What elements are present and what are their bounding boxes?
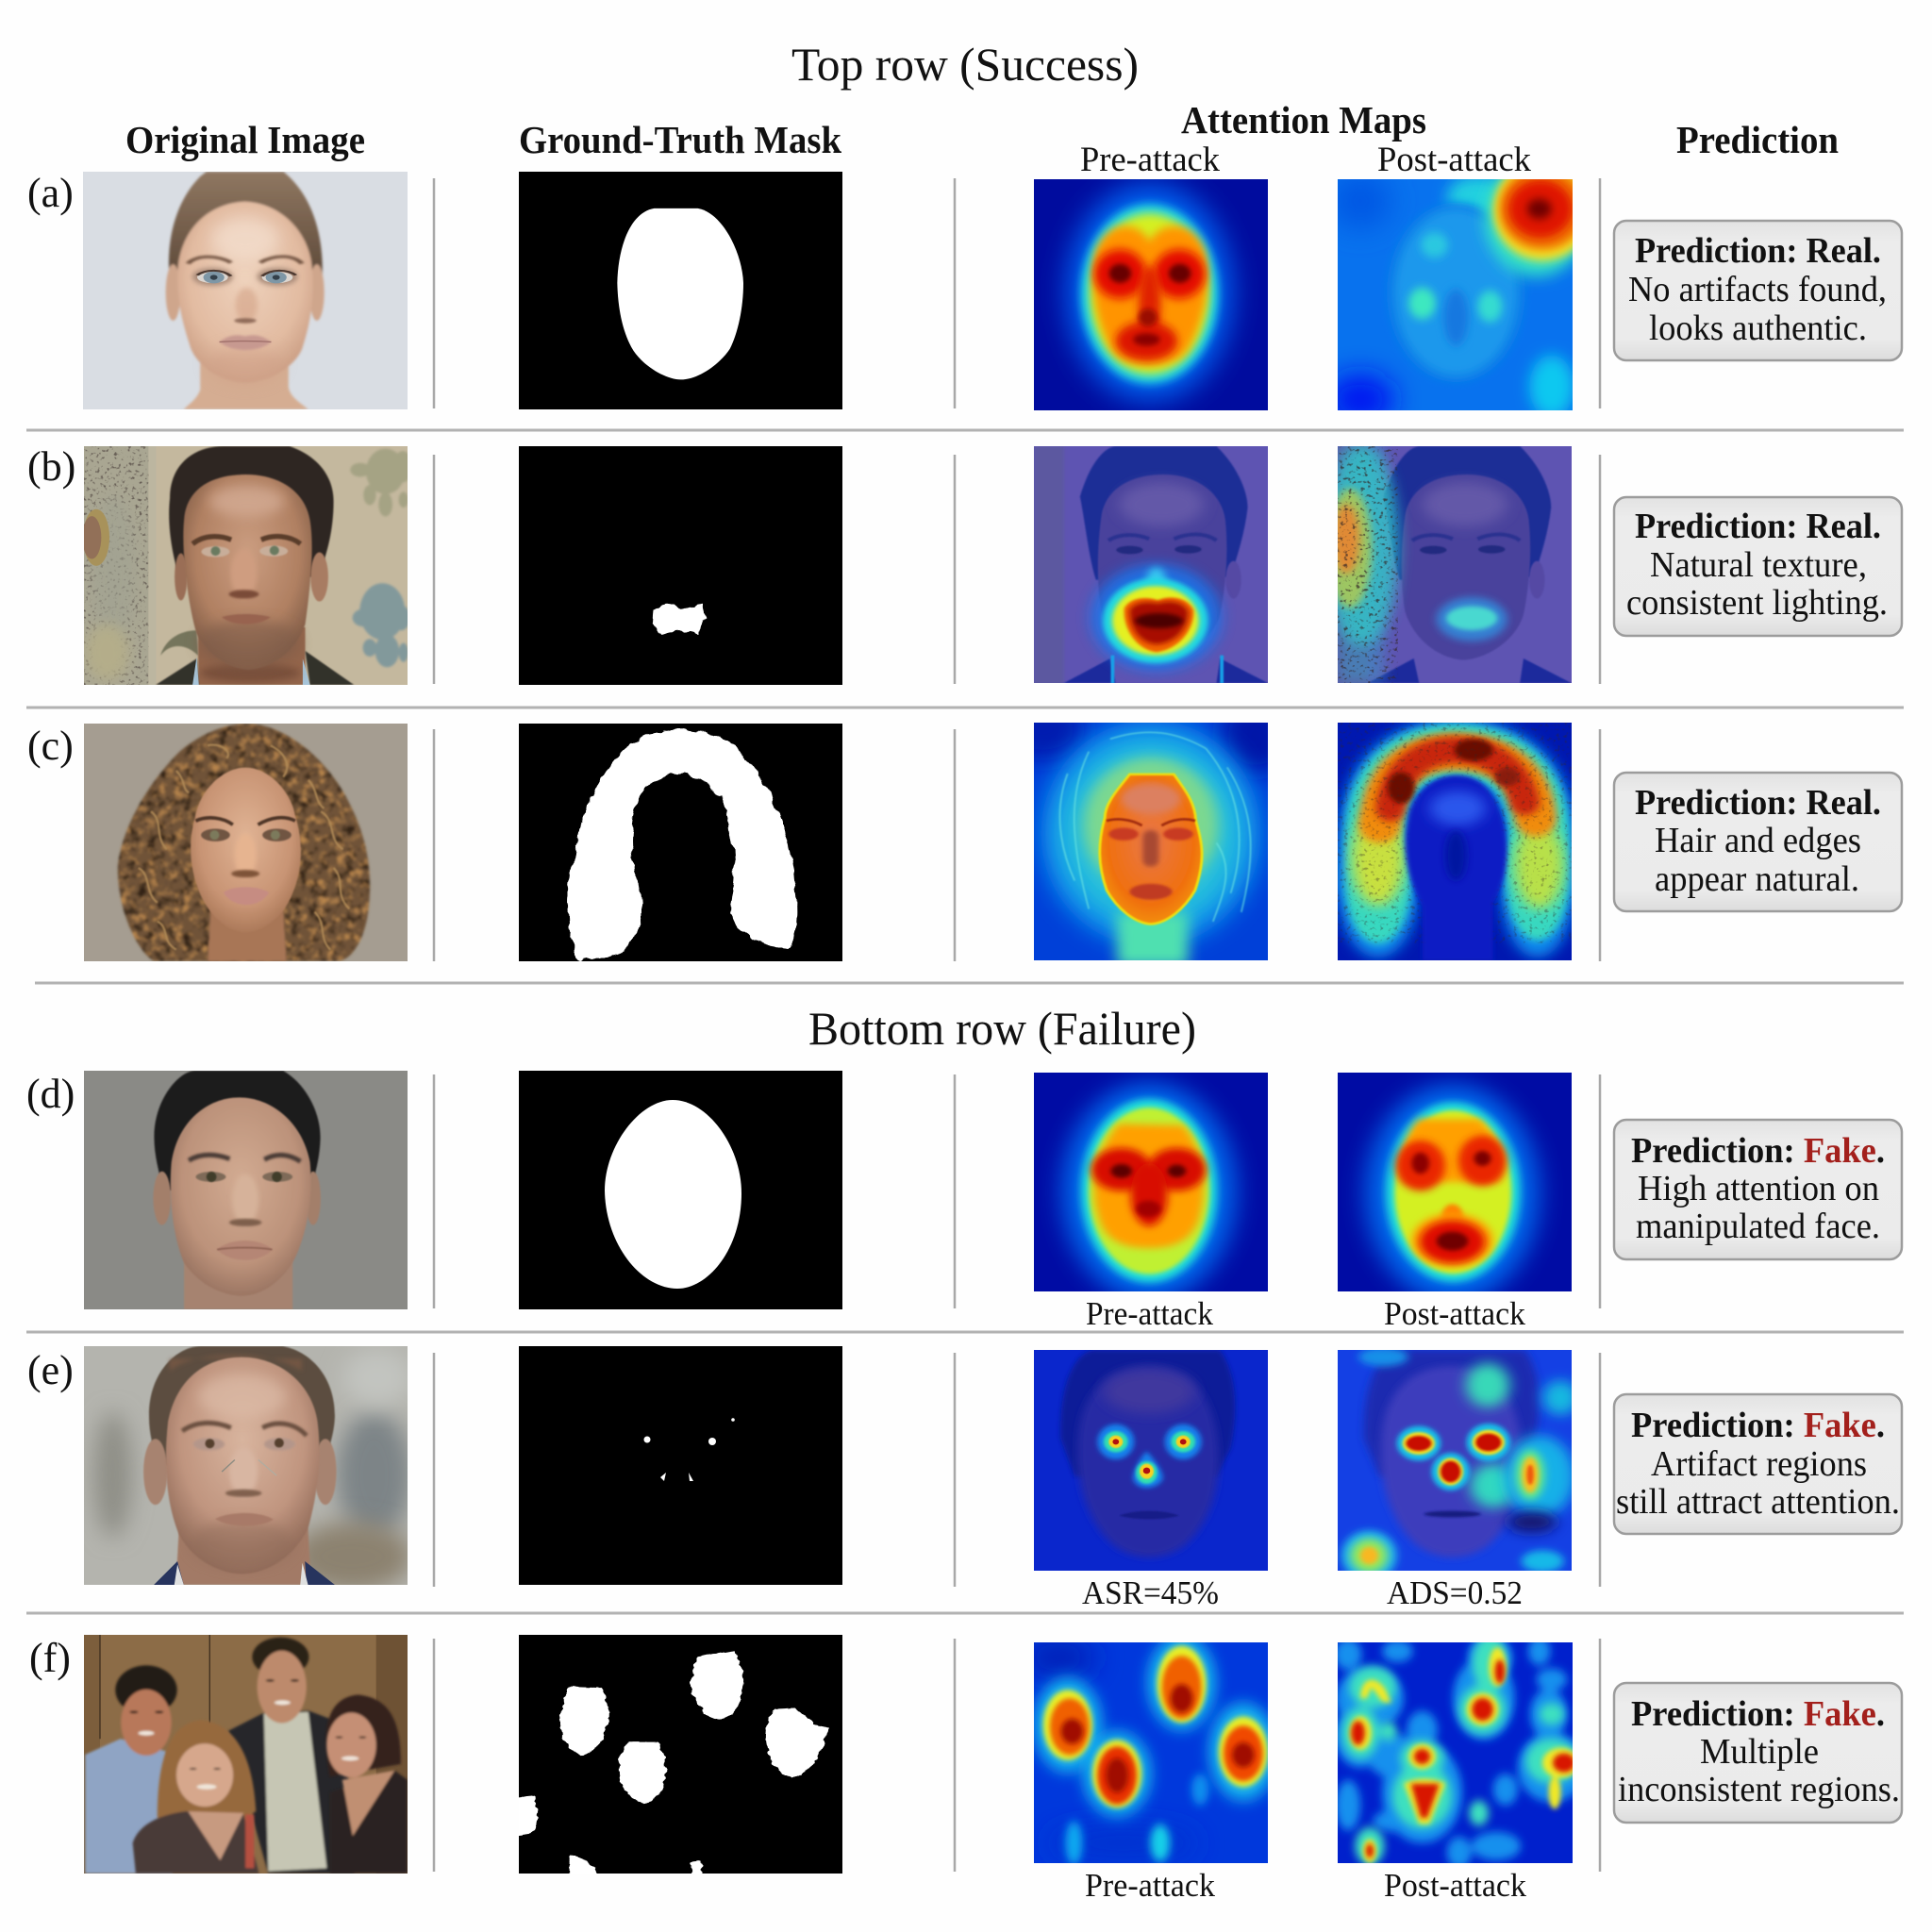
caption: row f pre-attack: Pre-attack [1085, 1867, 1215, 1904]
row labels: (f) [29, 1635, 71, 1681]
heatmap: row e post-attack [1338, 1350, 1572, 1571]
heatmap: row a post-attack [1338, 179, 1573, 410]
photo: row a woman [83, 172, 408, 409]
row labels: (e) [27, 1347, 74, 1393]
row labels: (b) [27, 443, 75, 490]
caption: ADS: ADS=0.52 [1387, 1574, 1523, 1611]
mask: row b [519, 446, 842, 685]
heading: attention maps: Attention Maps [1181, 98, 1426, 142]
heatmap: row b pre-attack [1034, 446, 1268, 683]
photo: row f group of four people [84, 1635, 408, 1874]
prediction box: row f [1614, 1683, 1902, 1823]
prediction box: row c: Prediction: Real. [1635, 783, 1881, 823]
heatmap: row c pre-attack [1034, 723, 1268, 960]
prediction box: row a: looks authentic. [1649, 308, 1867, 348]
sub-heading: pre-attack: Pre-attack [1080, 141, 1220, 179]
mask: row c hair [519, 724, 842, 961]
heatmap: row f post-attack [1338, 1642, 1573, 1863]
heading: original image: Original Image [125, 118, 365, 161]
heading: ground-truth mask: Ground-Truth Mask [519, 118, 841, 161]
prediction box: row b: consistent lighting. [1626, 583, 1888, 623]
title: bottom row: Bottom row (Failure) [808, 1002, 1196, 1055]
person: tall man [228, 1638, 355, 1874]
prediction box: row d: manipulated face. [1636, 1207, 1880, 1246]
mask: row f [519, 1635, 842, 1874]
prediction box: row f: Multiple [1700, 1732, 1819, 1772]
heatmap: row d pre-attack [1034, 1073, 1268, 1291]
person: centre woman [133, 1720, 259, 1874]
photo: row b man [84, 446, 408, 685]
prediction box: row a: Prediction: Real. [1635, 231, 1881, 271]
prediction box: row d [1614, 1120, 1902, 1259]
row labels: (d) [26, 1071, 75, 1117]
prediction box: row f: inconsistent regions. [1618, 1770, 1900, 1809]
sub-heading: post-attack: Post-attack [1377, 141, 1531, 179]
prediction box: row d: High attention on [1638, 1169, 1879, 1208]
caption: ASR: ASR=45% [1082, 1574, 1219, 1611]
prediction box: row a: No artifacts found, [1628, 270, 1887, 309]
prediction box: row c: appear natural. [1655, 859, 1859, 899]
prediction box: row c: Hair and edges [1655, 821, 1861, 860]
mask: row d [519, 1071, 842, 1309]
heatmap: row f pre-attack [1034, 1642, 1268, 1863]
heatmap: row a pre-attack [1034, 179, 1268, 410]
prediction box: row e [1614, 1394, 1902, 1534]
prediction box: row e: still attract attention. [1616, 1482, 1900, 1522]
caption: row d post-attack: Post-attack [1384, 1295, 1525, 1332]
caption: row f post-attack: Post-attack [1384, 1867, 1526, 1904]
person: right woman [326, 1695, 408, 1874]
prediction box: row b: Natural texture, [1650, 545, 1867, 585]
title: top row: Top row (Success) [791, 38, 1139, 91]
heatmap: row c post-attack [1338, 723, 1572, 960]
prediction box: row c [1614, 773, 1902, 911]
prediction box: row e: Prediction: Fake. [1631, 1406, 1885, 1445]
prediction box: row b [1614, 497, 1902, 636]
mask: row e [519, 1346, 842, 1585]
person: left man [85, 1665, 177, 1874]
row labels: (c) [27, 723, 74, 769]
photo: row c woman curly hair [84, 724, 408, 961]
row labels [26, 170, 75, 1681]
caption: row d pre-attack: Pre-attack [1086, 1295, 1213, 1332]
heatmap: row e pre-attack [1034, 1350, 1268, 1571]
prediction box: row a [1614, 221, 1902, 360]
prediction box: row d: Prediction: Fake. [1631, 1131, 1885, 1171]
prediction box: row f: Prediction: Fake. [1631, 1694, 1885, 1734]
vertical dividers [434, 178, 1600, 1872]
heatmap: row d post-attack [1338, 1073, 1572, 1291]
horizontal dividers [26, 430, 1904, 1613]
photo: row d man [84, 1071, 408, 1309]
prediction box: row e: Artifact regions [1651, 1444, 1867, 1484]
heatmap: row b post-attack [1338, 446, 1572, 683]
row labels: (a) [27, 170, 74, 216]
prediction box: row b: Prediction: Real. [1635, 507, 1881, 546]
heading: prediction: Prediction [1676, 118, 1839, 161]
photo: row e man [84, 1346, 408, 1585]
mask: row a [519, 172, 842, 409]
